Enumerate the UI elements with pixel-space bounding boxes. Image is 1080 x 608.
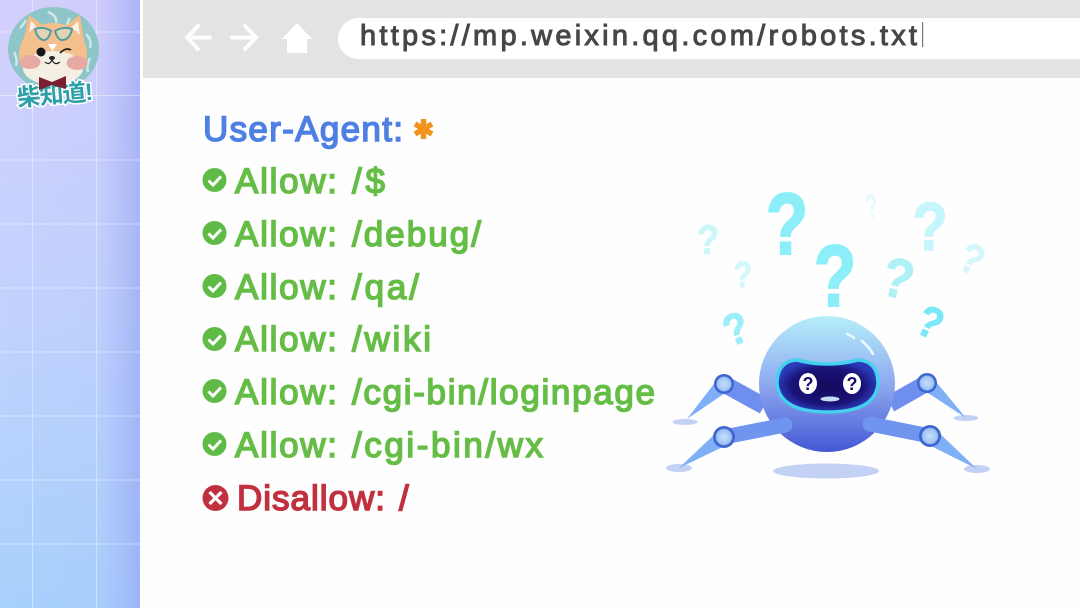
icon: orange asterisk <box>415 119 432 139</box>
rule: allow wx: /cgi-bin/wx <box>352 426 544 465</box>
address bar <box>338 18 1080 59</box>
rule: allow debug <box>202 215 481 254</box>
robot shadows <box>666 415 990 478</box>
logo wordmark: 柴知道! <box>16 79 94 112</box>
robot mouth <box>820 396 840 402</box>
illustration: floating question marks: ? <box>909 295 952 350</box>
rule: allow wx <box>202 426 544 465</box>
rule: allow root <box>202 162 385 201</box>
panel: left grid sidebar <box>0 0 140 608</box>
robot visor <box>777 360 878 412</box>
illustration: floating question marks: ? <box>766 176 808 273</box>
rule: allow root: Allow: <box>235 162 337 201</box>
illustration: spider robot <box>666 316 990 478</box>
robot eyes <box>799 373 861 394</box>
text cursor <box>922 22 923 47</box>
rule: allow loginpage: Allow: <box>235 373 337 412</box>
robot eyes: ? <box>846 374 858 394</box>
rule: allow wx: Allow: <box>235 426 337 465</box>
illustration: floating question marks <box>697 176 992 356</box>
icon: forward arrow <box>232 26 256 49</box>
icon: shiba dog logo <box>8 7 99 112</box>
illustration: floating question marks: ? <box>875 245 921 313</box>
robot highlight <box>847 334 873 354</box>
URL text: https://mp.weixin.qq.com/robots.txt <box>360 20 917 52</box>
rule: allow qa: Allow: <box>235 268 337 307</box>
icon: home <box>282 23 312 53</box>
rule: allow wiki <box>202 320 431 359</box>
rule: allow qa <box>202 268 419 307</box>
rule: allow wiki: Allow: <box>235 320 337 359</box>
robot body <box>759 316 895 452</box>
heading: user agent: User-Agent: <box>203 110 403 149</box>
illustration: floating question marks: ? <box>716 301 756 356</box>
rule: allow root: /$ <box>352 162 385 201</box>
rule: disallow root: Disallow: <box>237 479 385 518</box>
illustration: floating question marks: ? <box>734 256 752 296</box>
illustration: floating question marks: ? <box>863 187 880 226</box>
illustration: floating question marks: ? <box>697 217 719 264</box>
robot joints <box>713 373 941 448</box>
panel: browser toolbar <box>143 0 1080 78</box>
rule: allow loginpage <box>202 373 655 412</box>
robot front legs <box>724 424 930 437</box>
rule: allow loginpage: /cgi-bin/loginpage <box>352 373 655 412</box>
rule: allow wiki: /wiki <box>352 320 431 359</box>
rule: allow debug: /debug/ <box>352 215 481 254</box>
illustration: floating question marks: ? <box>814 228 856 325</box>
illustration: floating question marks: ? <box>952 234 992 285</box>
illustration: floating question marks: ? <box>912 190 948 265</box>
robot eyes: ? <box>802 374 814 394</box>
icon: back arrow <box>187 26 210 49</box>
rule: allow qa: /qa/ <box>352 268 419 307</box>
rule: allow debug: Allow: <box>235 215 337 254</box>
rule: disallow root: / <box>399 479 409 518</box>
robot legs <box>679 377 977 469</box>
